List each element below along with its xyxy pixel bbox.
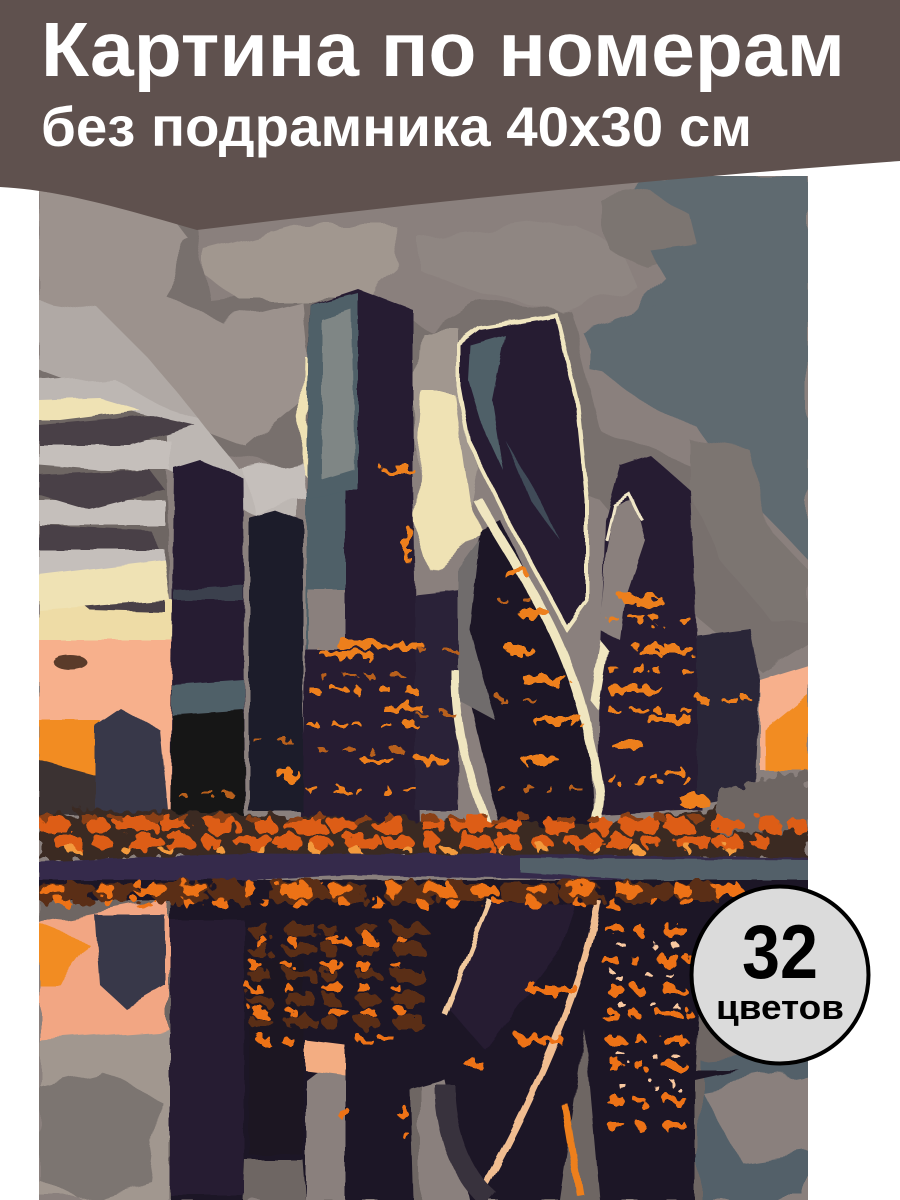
city lights on towers [180, 470, 750, 800]
subtitle: без подрамника 40х30 см [41, 95, 752, 158]
tower: middle [415, 590, 460, 810]
tower: right arch [598, 455, 702, 815]
skyline towers [95, 289, 760, 830]
badge: 32 colours [692, 886, 868, 1064]
tower: twisted lower [470, 520, 595, 830]
title: Картина по номерам [41, 7, 845, 93]
water: reflected lights [45, 890, 740, 1135]
header banner [0, 0, 900, 230]
shoreline lights [39, 770, 808, 860]
tower: small left [95, 708, 168, 815]
water: reflection background [39, 890, 808, 1200]
water: river band [39, 852, 808, 881]
sky: clouds [39, 176, 808, 670]
badge: 32 colours: 32 [742, 910, 818, 995]
tower: tall central [300, 289, 420, 830]
sky: horizon glow [39, 398, 808, 815]
tower: left [170, 460, 245, 825]
badge: 32 colours: цветов [716, 989, 844, 1027]
painting: Moscow City skyline at sunset [39, 176, 808, 1200]
tower: far right [697, 628, 760, 805]
tower: twisted top with cream outline [455, 318, 608, 826]
water: reflected towers [39, 880, 808, 1200]
tower: second left [249, 510, 303, 812]
